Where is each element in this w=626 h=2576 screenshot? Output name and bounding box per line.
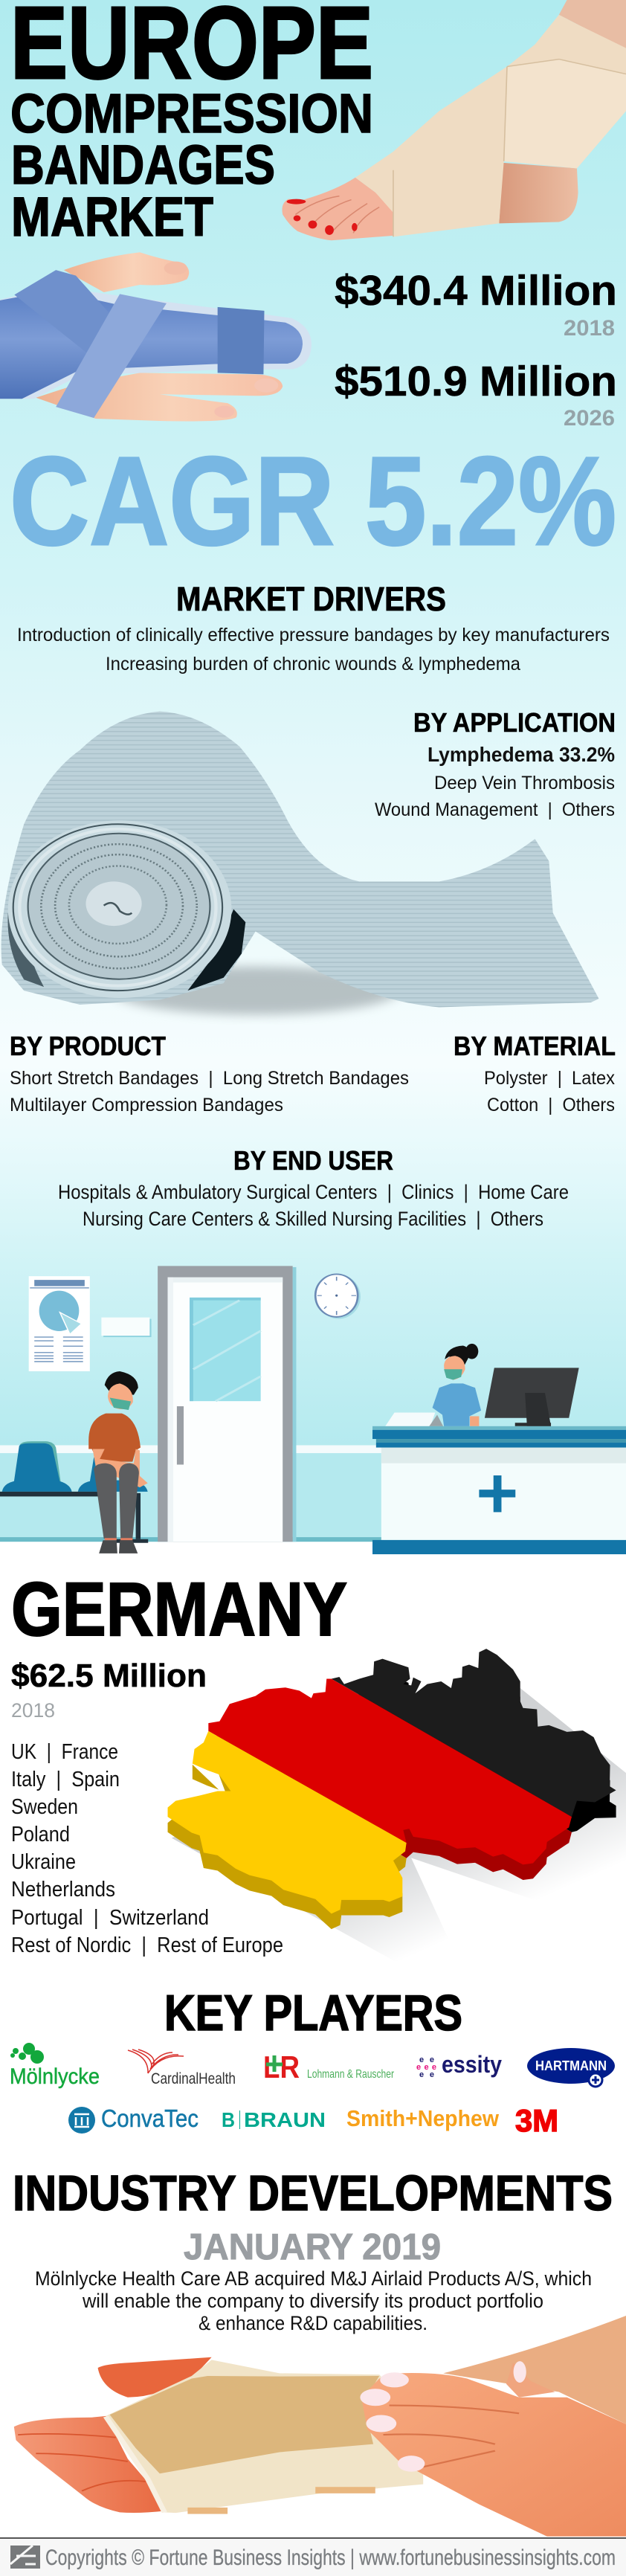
illustration: splinted hand	[0, 252, 312, 421]
logo: Hartmann	[527, 2048, 615, 2087]
illustration: hospital reception	[0, 1266, 626, 1554]
country list: Portugal | Switzerland	[11, 1906, 209, 1930]
logo: 3M: 3M	[515, 2103, 558, 2138]
by material	[454, 1031, 616, 1115]
poster	[29, 1276, 90, 1371]
by end user	[58, 1145, 569, 1230]
market size figures: $510.9 Million	[335, 358, 617, 405]
country list: Sweden	[11, 1795, 78, 1819]
logo: ConvaTec: ConvaTec	[101, 2105, 199, 2132]
logo: Cardinal Health: CardinalHealth	[151, 2070, 236, 2087]
by material: Polyster | Latex	[484, 1068, 615, 1089]
market drivers: Introduction of clinically effective pressure bandages by key manufacturers	[17, 625, 610, 645]
title: COMPRESSION	[10, 83, 373, 144]
country list: UK | France	[11, 1740, 118, 1764]
by end user: BY END USER	[233, 1145, 393, 1176]
waiting chairs	[0, 1441, 148, 1543]
title: BANDAGES	[11, 134, 275, 196]
by application: Wound Management | Others	[375, 799, 615, 820]
logo: Molnlycke	[10, 2043, 100, 2089]
Germany value	[11, 1658, 207, 1722]
logo: essity: eee	[416, 2063, 436, 2072]
by application	[375, 707, 616, 820]
market drivers	[17, 580, 610, 674]
by end user: Hospitals & Ambulatory Surgical Centers | Clinics | Home Care	[58, 1181, 569, 1203]
country list: Ukraine	[11, 1850, 76, 1874]
logo: ConvaTec	[68, 2105, 199, 2134]
clock	[315, 1274, 361, 1319]
logo: essity: essity	[442, 2051, 502, 2078]
wall sign	[101, 1318, 152, 1337]
market drivers: MARKET DRIVERS	[176, 580, 446, 618]
by product	[10, 1031, 409, 1115]
footer	[0, 2537, 626, 2576]
receptionist	[385, 1344, 481, 1426]
development description: will enable the company to diversify its product portfolio	[82, 2290, 543, 2312]
logo: B Braun: B	[222, 2108, 235, 2131]
by product: BY PRODUCT	[10, 1031, 166, 1061]
market size figures	[335, 267, 617, 431]
development description: Mölnlycke Health Care AB acquired M&J Airlaid Products A/S, which	[35, 2267, 592, 2290]
logo: essity	[416, 2051, 502, 2079]
logo: Lohmann and Rauscher: Lohmann & Rauscher	[307, 2068, 395, 2081]
seated patient	[88, 1371, 148, 1553]
market size figures: 2026	[564, 406, 615, 431]
logo: essity: ee	[419, 2070, 434, 2079]
illustration: bandaged foot	[282, 0, 626, 240]
illustration: bandage roll	[1, 712, 599, 1014]
country list: Rest of Nordic | Rest of Europe	[11, 1933, 283, 1957]
by end user: Nursing Care Centers & Skilled Nursing Facilities | Others	[83, 1208, 543, 1230]
logo: Molnlycke: Mölnlycke	[10, 2064, 100, 2089]
market size figures: $340.4 Million	[335, 267, 617, 315]
door	[158, 1266, 296, 1542]
illustration: hands with wrist support	[14, 2316, 626, 2537]
by product: Short Stretch Bandages | Long Stretch Bandages	[10, 1068, 409, 1089]
development description: & enhance R&D capabilities.	[199, 2312, 427, 2334]
by application: Lymphedema 33.2%	[427, 743, 615, 766]
logo: Lohmann and Rauscher: LR	[263, 2049, 300, 2084]
logo: Smith and Nephew: Smith+Nephew	[346, 2105, 500, 2131]
logo: B Braun: BRAUN	[244, 2108, 326, 2131]
reception desk	[372, 1426, 626, 1554]
country list: Italy | Spain	[11, 1768, 120, 1791]
Germany value: $62.5 Million	[11, 1658, 207, 1694]
by product: Multilayer Compression Bandages	[10, 1095, 283, 1115]
map: Germany flag	[168, 1649, 626, 1962]
market drivers: Increasing burden of chronic wounds & lymphedema	[106, 654, 520, 674]
logo: Lohmann and Rauscher	[263, 2049, 395, 2084]
market size figures: 2018	[564, 316, 615, 341]
development date: JANUARY 2019	[184, 2227, 441, 2267]
country list: Poland	[11, 1823, 70, 1846]
country list	[11, 1740, 283, 1957]
logo: Hartmann: HARTMANN	[535, 2058, 607, 2073]
logo: Cardinal Health	[128, 2049, 236, 2087]
logo: essity: ee	[419, 2055, 434, 2064]
Germany value: 2018	[11, 1699, 55, 1722]
country list: Netherlands	[11, 1878, 115, 1902]
by application: Deep Vein Thrombosis	[434, 773, 615, 793]
Germany heading: GERMANY	[11, 1567, 347, 1652]
title	[10, 0, 373, 248]
computer monitor	[485, 1368, 579, 1426]
development description	[35, 2267, 592, 2334]
key players heading: KEY PLAYERS	[164, 1985, 462, 2041]
by material: Cotton | Others	[487, 1095, 615, 1115]
title: MARKET	[11, 186, 213, 248]
icon: Fortune Business Insights logo	[10, 2546, 40, 2569]
